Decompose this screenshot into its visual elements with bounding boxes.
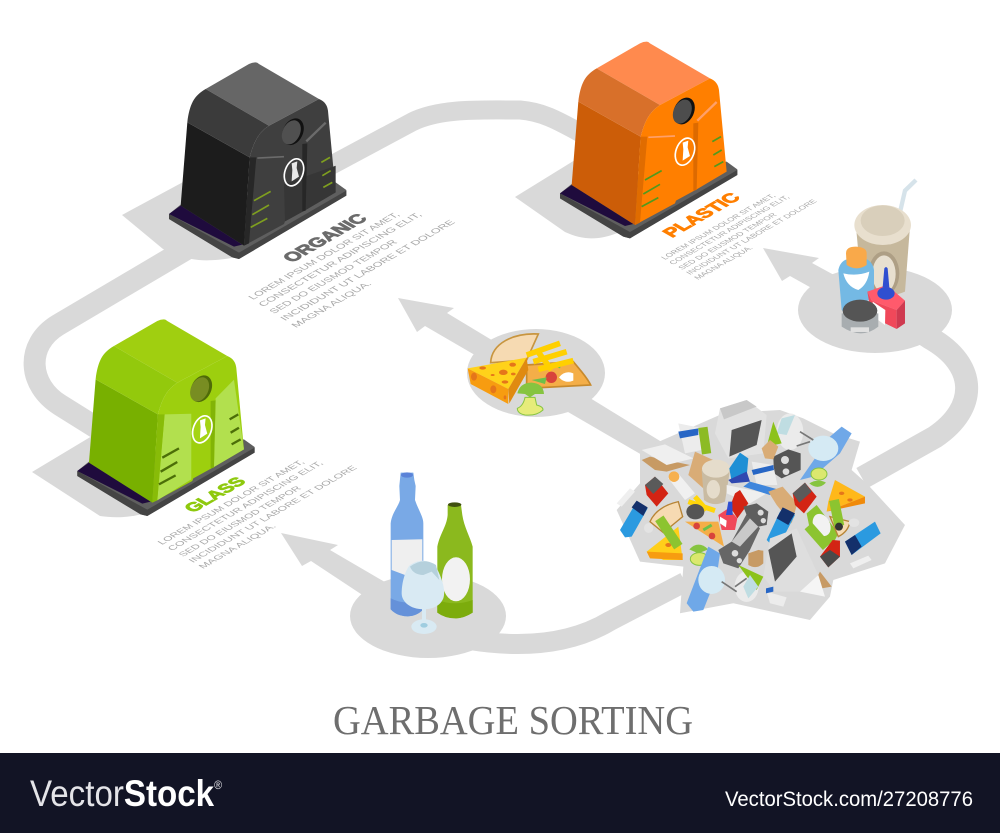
title: GARBAGE SORTING xyxy=(333,697,693,743)
apple left xyxy=(689,545,708,565)
glue bottle: red centre xyxy=(718,502,737,530)
battery: red centre xyxy=(730,490,748,518)
battery: blue centre xyxy=(767,507,795,545)
text block: glass: SED DO EIUSMOD TEMPOR xyxy=(176,484,303,558)
icon: food waste xyxy=(468,334,591,415)
plate: food waste xyxy=(467,329,605,417)
text block: organic: INCIDIDUNT UT LABORE ET DOLORE xyxy=(278,218,457,322)
bin: organic xyxy=(169,62,346,259)
carton: centre xyxy=(752,462,777,485)
footer logo: VectorStock xyxy=(30,773,225,814)
heading: organic: ORGANIC xyxy=(278,211,372,265)
cardboard box xyxy=(688,452,717,488)
glasses xyxy=(797,432,813,446)
battery: red right xyxy=(793,483,817,513)
text block: glass: MAGNA ALIQUA. xyxy=(196,522,278,570)
footer bar xyxy=(0,753,1000,833)
battery: red left xyxy=(645,477,668,507)
battery: green left xyxy=(659,518,678,547)
text block: organic: SED DO EIUSMOD TEMPOR xyxy=(267,238,400,315)
pizza xyxy=(685,522,724,547)
cheese right xyxy=(827,480,865,512)
clipboard: top xyxy=(767,413,803,450)
box: small top xyxy=(762,440,778,459)
battery: blue centre back xyxy=(728,453,750,483)
recycling loop path xyxy=(32,110,967,644)
heading: plastic: PLASTIC xyxy=(658,190,745,240)
clipboard: bottom xyxy=(735,565,763,602)
icon: plastic items xyxy=(838,180,916,333)
speaker: centre xyxy=(718,514,760,568)
apple right xyxy=(809,468,827,487)
carton: bottom xyxy=(766,587,787,607)
small tube right xyxy=(850,556,872,568)
book and box flap xyxy=(642,444,693,472)
bin: plastic xyxy=(560,42,737,238)
tan box centre xyxy=(768,487,797,523)
pile shadow xyxy=(617,410,905,620)
bread in pile xyxy=(650,502,683,533)
text block: organic: LOREM IPSUM DOLOR SIT AMET, xyxy=(246,211,402,301)
cap: orange xyxy=(669,471,679,482)
carton: top xyxy=(678,423,711,454)
fries xyxy=(688,497,715,511)
glasses: bottom xyxy=(722,578,747,592)
text block: organic: CONSECTETUR ADIPISCING ELIT, xyxy=(256,211,424,308)
white paper with blue strip xyxy=(727,482,780,503)
footer id: VectorStock.com/27208776 xyxy=(725,788,973,811)
plate: plastic waste xyxy=(798,267,952,353)
text block: plastic: LOREM IPSUM DOLOR SIT AMET, xyxy=(659,192,778,261)
bin: glass xyxy=(77,319,255,516)
plate: glass waste xyxy=(350,574,506,658)
bottle: white upper left xyxy=(668,472,695,500)
battery: blue left xyxy=(620,501,648,537)
text block: plastic: SED DO EIUSMOD TEMPOR xyxy=(676,211,779,271)
battery: green right xyxy=(834,500,843,531)
text block: plastic: INCIDIDUNT UT LABORE ET DOLORE xyxy=(684,198,819,276)
text block: glass: CONSECTETUR ADIPISCING ELIT, xyxy=(165,459,325,552)
speaker: top right xyxy=(773,449,801,478)
speaker: upper centre xyxy=(743,503,768,527)
icon: mixed garbage pile xyxy=(617,400,905,620)
text block: plastic: MAGNA ALIQUA. xyxy=(692,244,755,281)
heading: glass: GLASS xyxy=(180,474,250,515)
water bottle: top right xyxy=(800,427,852,480)
arrow: to organic bin xyxy=(398,298,500,358)
monitor: back xyxy=(715,400,767,458)
battery: blue right xyxy=(845,522,881,555)
battery: dark lower right xyxy=(820,540,840,567)
text block: organic: MAGNA ALIQUA. xyxy=(289,280,374,329)
battery: green lower right xyxy=(808,526,827,547)
jar lid right xyxy=(849,518,859,527)
cheese left xyxy=(647,527,683,560)
coffee cup in pile xyxy=(702,460,730,504)
arrow: to plastic bin xyxy=(763,248,880,315)
monitor: front xyxy=(763,528,825,597)
water bottle: bottom xyxy=(687,547,725,612)
text block: glass: INCIDIDUNT UT LABORE ET DOLORE xyxy=(186,464,359,564)
green bottle and label right xyxy=(807,505,838,547)
text block: plastic: CONSECTETUR ADIPISCING ELIT, xyxy=(667,194,792,266)
text block: organic xyxy=(246,211,457,329)
text block: plastic xyxy=(659,192,819,281)
bread right xyxy=(830,517,850,537)
icon: glass bottles xyxy=(391,472,473,634)
text block: glass: LOREM IPSUM DOLOR SIT AMET, xyxy=(155,458,307,546)
small jar lid xyxy=(644,523,653,533)
text block: glass xyxy=(155,458,359,570)
cup: lower centre xyxy=(748,539,772,567)
jar: dark xyxy=(686,504,704,519)
box flap lower xyxy=(815,572,832,588)
small tube left xyxy=(617,488,635,507)
footer logo: ® xyxy=(214,778,222,792)
arrow: to glass bin xyxy=(281,533,390,600)
